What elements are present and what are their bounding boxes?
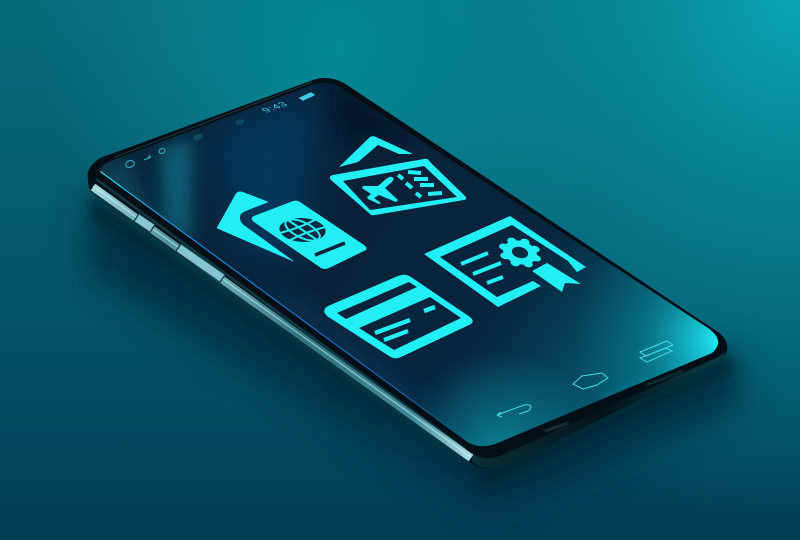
ticket frame	[330, 159, 466, 215]
plane	[362, 177, 398, 204]
screen	[100, 82, 718, 446]
nav icon: home	[573, 373, 608, 389]
passport bar	[315, 243, 345, 255]
certificate text lines	[461, 253, 503, 283]
status bar	[125, 93, 314, 169]
status icon: signal	[144, 155, 151, 160]
nav icon: recents	[640, 341, 673, 362]
ticket details	[398, 172, 442, 197]
cyan lower edge glow	[603, 378, 652, 398]
card chip bar	[424, 307, 435, 311]
silver side strip	[93, 187, 471, 458]
icon: passport	[217, 192, 366, 269]
side button: upper	[136, 217, 153, 229]
sensor dot	[192, 133, 204, 141]
passport back page	[217, 192, 293, 261]
seal	[491, 233, 549, 272]
ribbon	[532, 263, 581, 292]
camera dot	[235, 118, 245, 126]
icon: certificate with seal	[424, 216, 586, 307]
card text bar long	[375, 320, 410, 333]
phone shadow	[85, 192, 745, 510]
side button: lower	[178, 247, 223, 279]
passport globe	[270, 213, 335, 247]
screen reflections	[100, 90, 419, 404]
dark teal band between screen and side strip	[96, 179, 465, 449]
navigation bar	[497, 341, 673, 417]
screen edge glow	[100, 172, 462, 438]
clock: 9:43	[260, 101, 291, 115]
status icon: wifi	[158, 148, 166, 154]
icon: boarding pass with plane	[330, 136, 466, 215]
rim highlights	[115, 82, 683, 431]
battery icon	[300, 93, 314, 100]
side strip lower edge	[90, 191, 468, 462]
card text bar short	[384, 331, 408, 340]
side strip highlight	[93, 186, 471, 457]
status icon: alarm	[125, 159, 135, 169]
lower body rim	[472, 352, 726, 469]
ticket flap	[339, 136, 413, 167]
nav icon: back	[497, 405, 531, 417]
icon: credit card	[324, 275, 473, 358]
phone body	[88, 78, 727, 469]
certificate frame	[424, 216, 586, 307]
smartphone	[80, 70, 740, 470]
passport cover	[252, 201, 366, 269]
